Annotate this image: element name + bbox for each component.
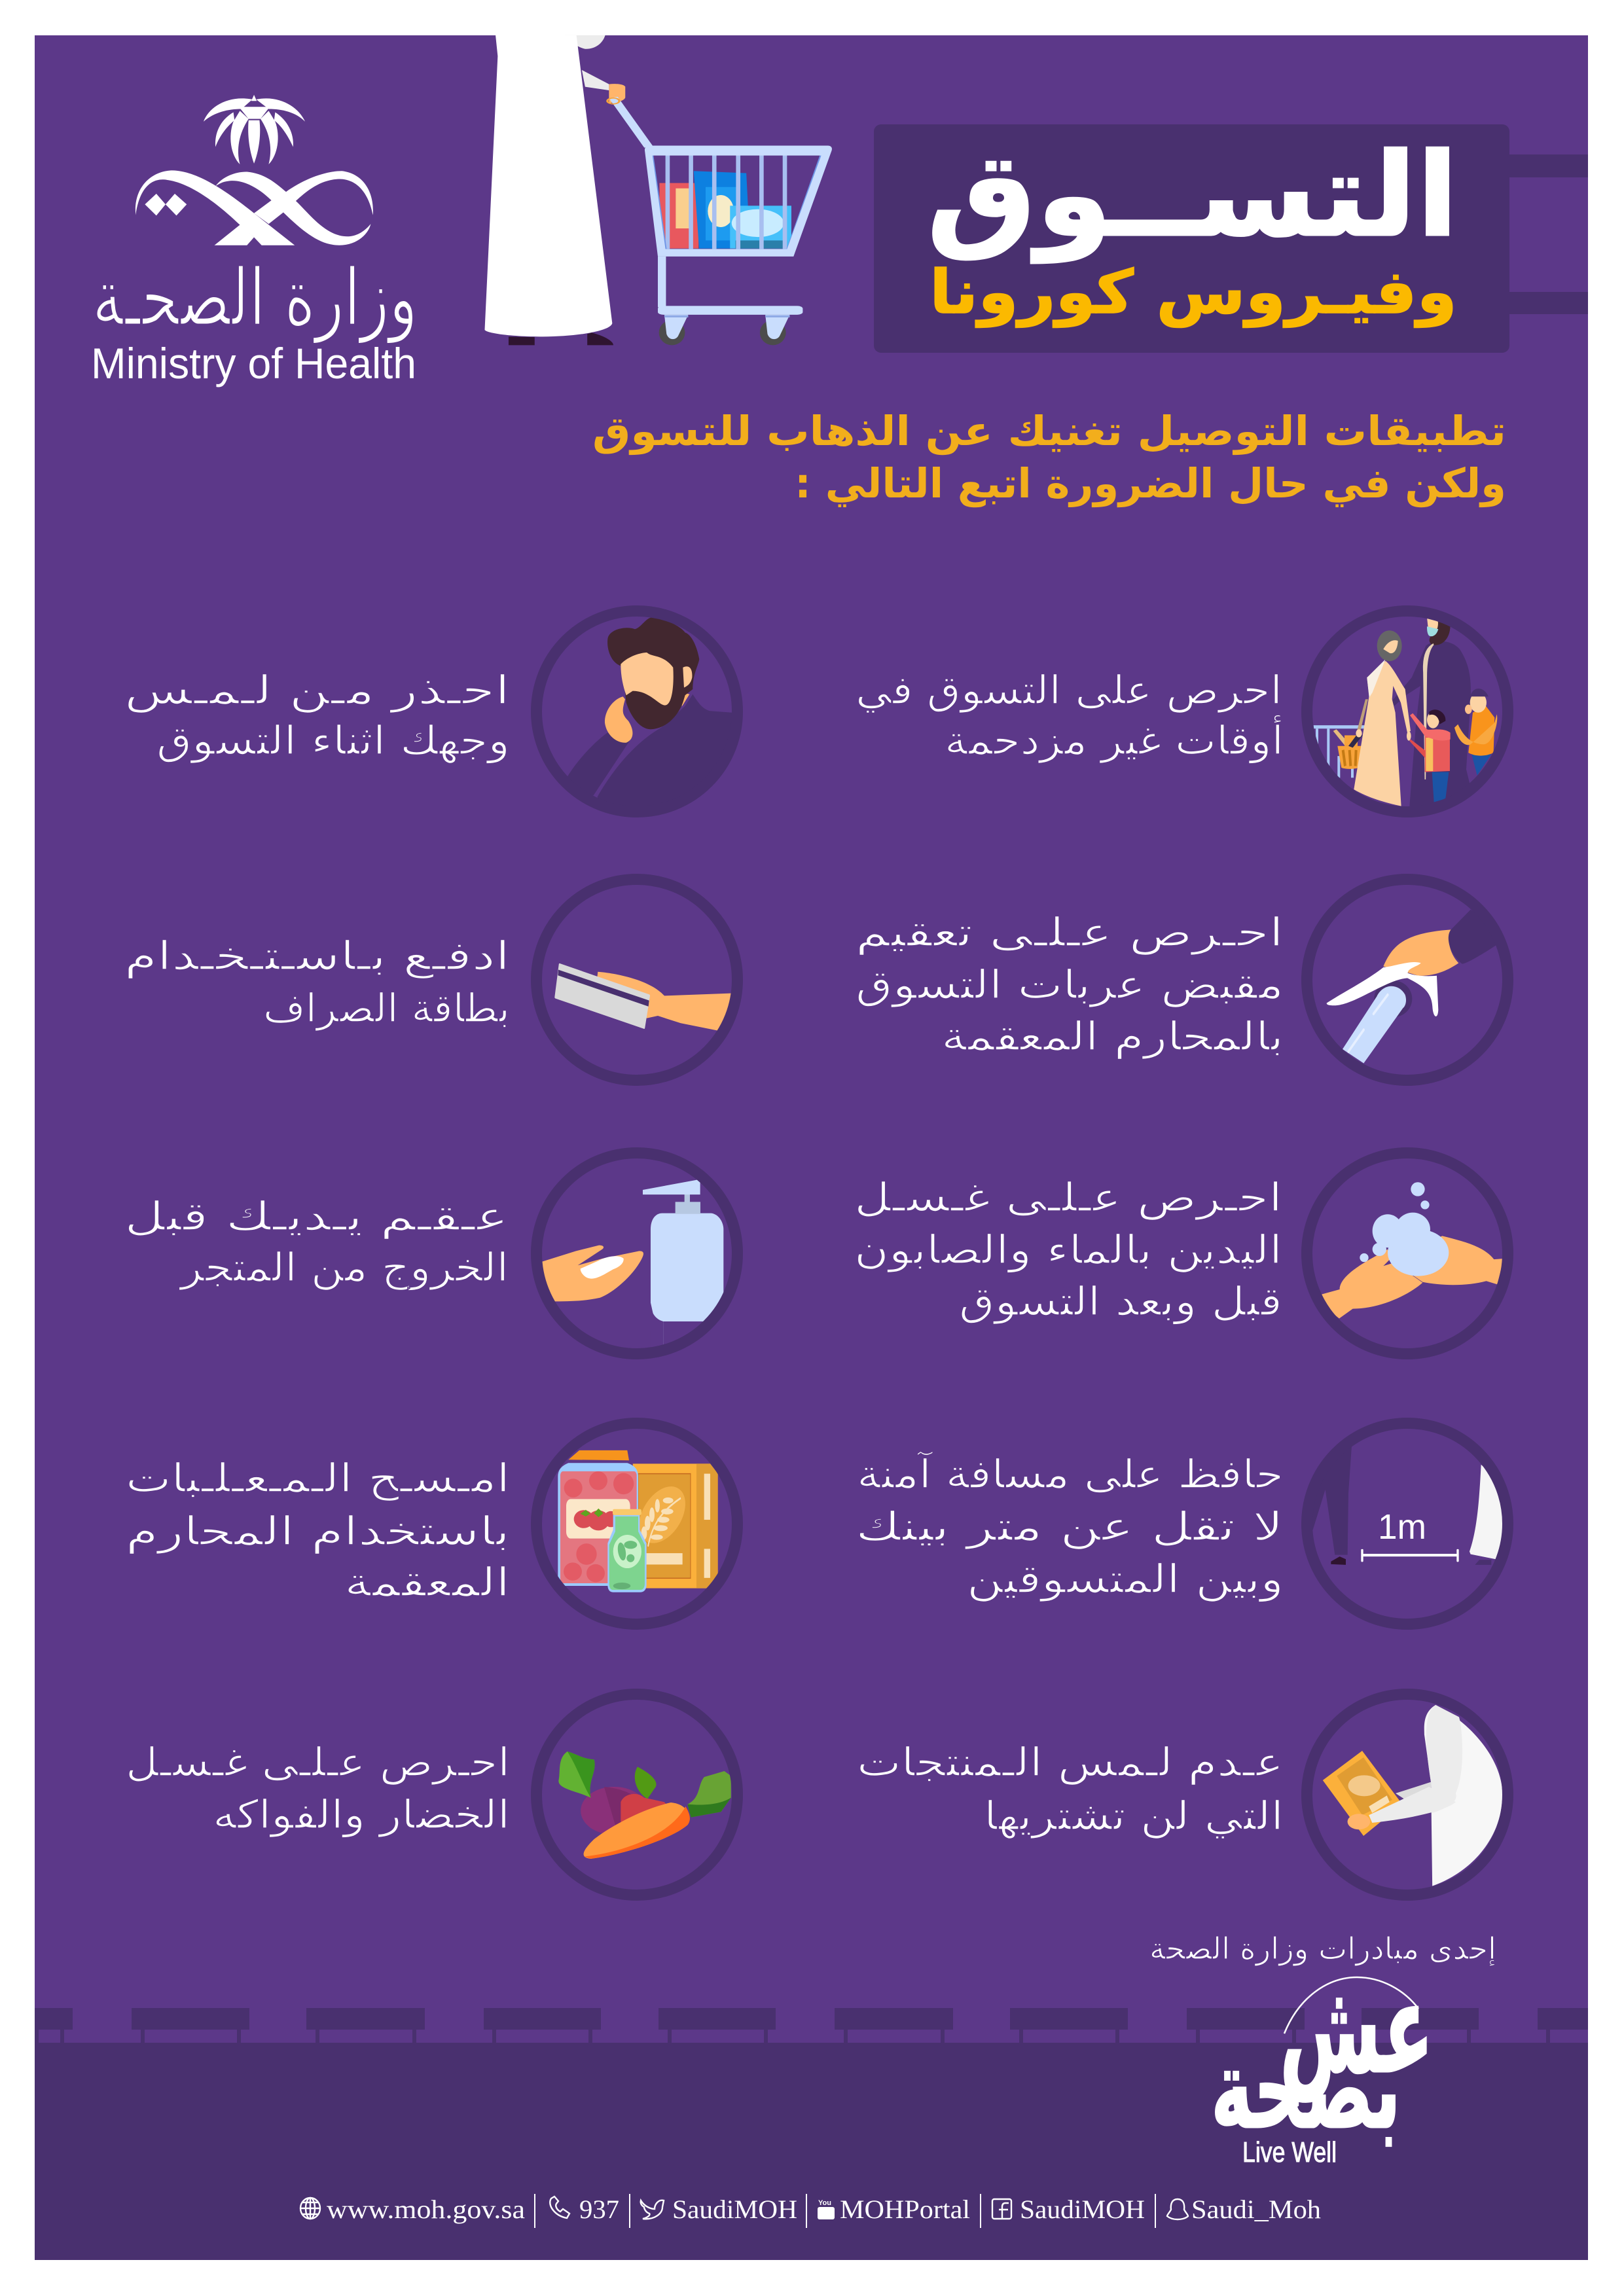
text: wash vegetables: احـرص عـلـى غـسـل — [126, 1740, 510, 1785]
item: pay by card — [124, 880, 737, 1080]
icon ring — [537, 1694, 737, 1895]
icon: man — [484, 35, 625, 345]
icon ring — [537, 880, 737, 1080]
logo: Live Well — [1211, 1956, 1434, 2168]
intro text: تطبيقات التوصيل تغنيك عن الذهاب للتسوق — [592, 407, 1506, 455]
text: youtube channel: MOHPortal — [840, 2195, 970, 2224]
text: wash vegetables — [126, 1740, 510, 1838]
icon: youtube — [818, 2199, 835, 2219]
text: sanitize hands before leaving — [124, 1194, 509, 1291]
panel: title box — [874, 124, 1588, 353]
intro text: ولكن في حال الضرورة اتبع التالي : — [795, 459, 1506, 507]
text: shop at uncrowded times: أوقات غير مزدحمة — [945, 715, 1284, 764]
item: do not touch unneeded products — [857, 1694, 1508, 1895]
logo: Live Well: Live Well — [1242, 2136, 1337, 2168]
icon ring — [537, 611, 737, 812]
icon ring — [1307, 880, 1508, 1080]
text: wash hands: قبل وبعد التسوق — [959, 1279, 1282, 1325]
icon: youtube: You — [818, 2199, 831, 2207]
item: avoid touching face — [124, 611, 746, 819]
text: Arabic ministry name: وزارة الصحـة — [92, 253, 418, 344]
panel: footer band — [35, 2043, 1588, 2260]
text: 1m label: 1m — [1378, 1507, 1426, 1547]
intro text — [592, 407, 1506, 507]
text: keep safe distance: لا تقل عن متر بينك — [856, 1504, 1284, 1550]
text: sanitize cart handles: مقبض عربات التسوق — [856, 962, 1284, 1008]
logo: Live Well: عش — [1280, 1956, 1434, 2102]
text: keep safe distance: حافظ على مسافة آمنة — [857, 1450, 1284, 1498]
man in white thobe with shopping cart — [484, 35, 832, 345]
icon ring — [537, 1153, 737, 1354]
item: wipe canned goods — [126, 1423, 737, 1624]
text: avoid touching face: وجهك اثناء التسوق — [156, 718, 510, 764]
text: pay by card: ادفـع بـاسـتـخـدام — [124, 933, 510, 979]
text: do not touch unneeded products — [857, 1740, 1284, 1839]
icon: globe — [300, 2198, 320, 2219]
logo: Ministry of Health — [91, 95, 418, 387]
text: wipe canned goods: باستخدام المحارم — [126, 1509, 510, 1554]
title: التســوق — [927, 128, 1458, 263]
text: keep safe distance — [856, 1450, 1284, 1602]
text: do not touch unneeded products: عـدم لـمس الـمنتجات — [857, 1740, 1284, 1785]
logo: Live Well: بصحة — [1211, 2027, 1401, 2153]
subtitle: وفيـروس كورونا — [929, 257, 1457, 328]
icon: palm and ribbon emblem — [135, 95, 373, 245]
text: facebook page: SaudiMOH — [1020, 2195, 1145, 2224]
icon: hand under soap dispenser — [542, 1179, 724, 1344]
text: sanitize cart handles: بالمحارم المعقمة — [941, 1014, 1284, 1060]
text: wash hands: اليدين بالماء والصابون — [854, 1227, 1282, 1273]
text: keep safe distance: وبين المتسوقين — [967, 1556, 1284, 1602]
icon: family shopping — [1314, 617, 1497, 810]
icon: snapchat — [1167, 2199, 1188, 2219]
icon: vegetables — [558, 1751, 731, 1859]
text: shop at uncrowded times — [856, 668, 1284, 764]
icon ring — [1307, 611, 1508, 812]
item: sanitize hands before leaving — [124, 1153, 737, 1361]
icon: one metre distance — [1312, 1446, 1502, 1565]
icon: washing hands — [1322, 1182, 1504, 1318]
text: wash vegetables: الخضار والفواكه — [213, 1792, 510, 1838]
icon: phone — [550, 2197, 569, 2218]
text: snapchat handle: Saudi_Moh — [1191, 2195, 1321, 2224]
item: keep safe distance — [856, 1423, 1508, 1624]
text: website: www.moh.gov.sa — [327, 2195, 525, 2224]
text: wash hands: احـرص عـلـى غـسـل — [854, 1175, 1282, 1221]
text: pay by card — [124, 933, 510, 1031]
contact bar — [300, 2194, 1321, 2228]
text: twitter handle: SaudiMOH — [672, 2195, 797, 2224]
text: sanitize cart handles: احـرص عـلـى تعقيم — [856, 910, 1284, 956]
text: phone number: 937 — [579, 2195, 619, 2224]
icon: arm holding product — [1323, 1705, 1502, 1886]
icon ring — [1307, 1153, 1508, 1354]
icon: canned goods and cereal box — [558, 1450, 718, 1592]
text: wipe canned goods: المعقمة — [344, 1560, 510, 1605]
icon ring — [537, 1423, 737, 1624]
icon: hand holding bank card — [556, 965, 735, 1033]
item: wash vegetables — [126, 1694, 737, 1895]
text: sanitize cart handles — [856, 910, 1284, 1060]
text: Ministry of Health: Ministry of Health — [91, 339, 416, 387]
item: shop at uncrowded times — [856, 611, 1508, 812]
item: sanitize cart handles — [856, 880, 1508, 1080]
text: wash hands — [854, 1175, 1282, 1325]
item: wash hands — [854, 1153, 1508, 1354]
icon ring — [1307, 1694, 1508, 1895]
icon ring — [1307, 1423, 1508, 1624]
text: shop at uncrowded times: احرص على التسوق في — [856, 668, 1282, 713]
benches row — [35, 2008, 1588, 2043]
text: avoid touching face — [124, 668, 510, 764]
text: wipe canned goods — [126, 1456, 510, 1605]
text: sanitize hands before leaving: الخروج من المتجر — [179, 1245, 509, 1291]
text: do not touch unneeded products: التي لن تشتريها — [984, 1793, 1284, 1839]
text: one of the ministry initiatives: إحدى مبادرات وزارة الصحة — [1149, 1931, 1496, 1967]
text: pay by card: بطاقة الصراف — [263, 986, 510, 1031]
text: avoid touching face: احـذر مـن لـمـس — [124, 668, 510, 713]
icon: facebook — [992, 2199, 1011, 2219]
icon: twitter — [641, 2200, 664, 2219]
icon: wiping cart handle — [1327, 910, 1507, 1063]
text: sanitize hands before leaving: عـقـم يـديـك قبل — [124, 1194, 509, 1240]
icon: man touching beard — [568, 618, 732, 806]
icon: shopping cart — [607, 98, 832, 345]
text: wipe canned goods: امـسـح الـمـعـلـبات — [126, 1456, 510, 1501]
